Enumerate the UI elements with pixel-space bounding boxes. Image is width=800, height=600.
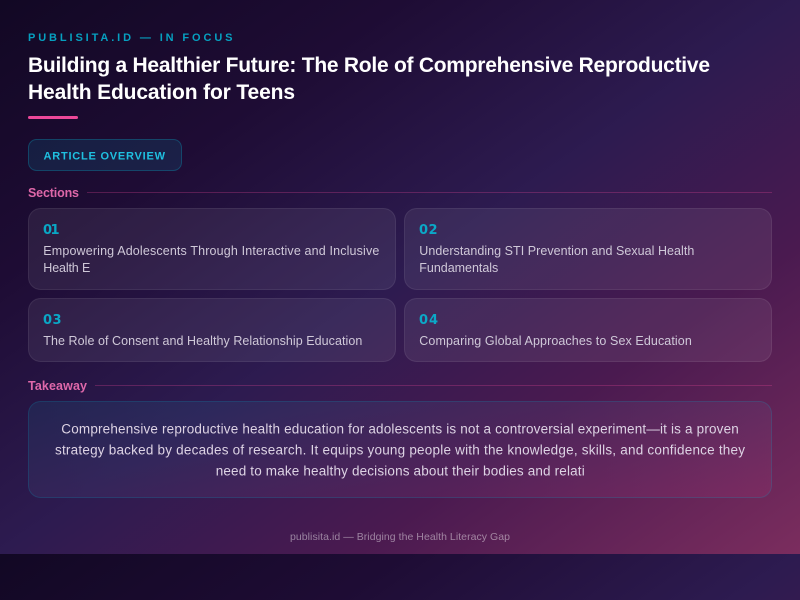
title (28, 54, 710, 104)
card 02: Fundamentals (419, 261, 498, 275)
title: Health Education for Teens (28, 81, 295, 104)
footer: publisita.id — Bridging the Health Literacy Gap (290, 531, 510, 543)
card 04 (404, 298, 772, 362)
eyebrow label: PUBLISITA.ID — IN FOCUS (28, 32, 232, 44)
card 04: 04 (419, 313, 438, 328)
card 01: 01 (43, 223, 60, 238)
card 02: Understanding STI Prevention and Sexual Health (419, 244, 694, 258)
card 02 (404, 208, 772, 290)
takeaway text (55, 421, 745, 478)
card 03 (28, 298, 396, 362)
card 04: Comparing Global Approaches to Sex Education (419, 334, 692, 348)
panel: section cards (28, 208, 772, 362)
card 01 (28, 208, 396, 290)
panel: takeaway (28, 402, 772, 498)
card 03: 03 (43, 313, 62, 328)
takeaway text: strategy backed by decades of research. It equips young people with the knowledge, skills, and confidence they (55, 442, 745, 457)
card 01: Empowering Adolescents Through Interactive and Inclusive (43, 244, 379, 258)
title: Building a Healthier Future: The Role of Comprehensive Reproductive (28, 54, 710, 77)
badge: article overview (28, 140, 182, 170)
badge: article overview: ARTICLE OVERVIEW (44, 150, 166, 162)
card 01: Health E (43, 261, 90, 275)
card 02: 02 (419, 223, 438, 238)
heading: sections: Sections (28, 186, 79, 200)
takeaway text: need to make healthy decisions about their bodies and relati (216, 463, 585, 478)
takeaway text: Comprehensive reproductive health education for adolescents is not a controversial experiment—it is a proven (61, 421, 739, 436)
heading: takeaway: Takeaway (28, 379, 87, 393)
title accent bar (28, 116, 78, 119)
card 03: The Role of Consent and Healthy Relationship Education (43, 334, 362, 348)
